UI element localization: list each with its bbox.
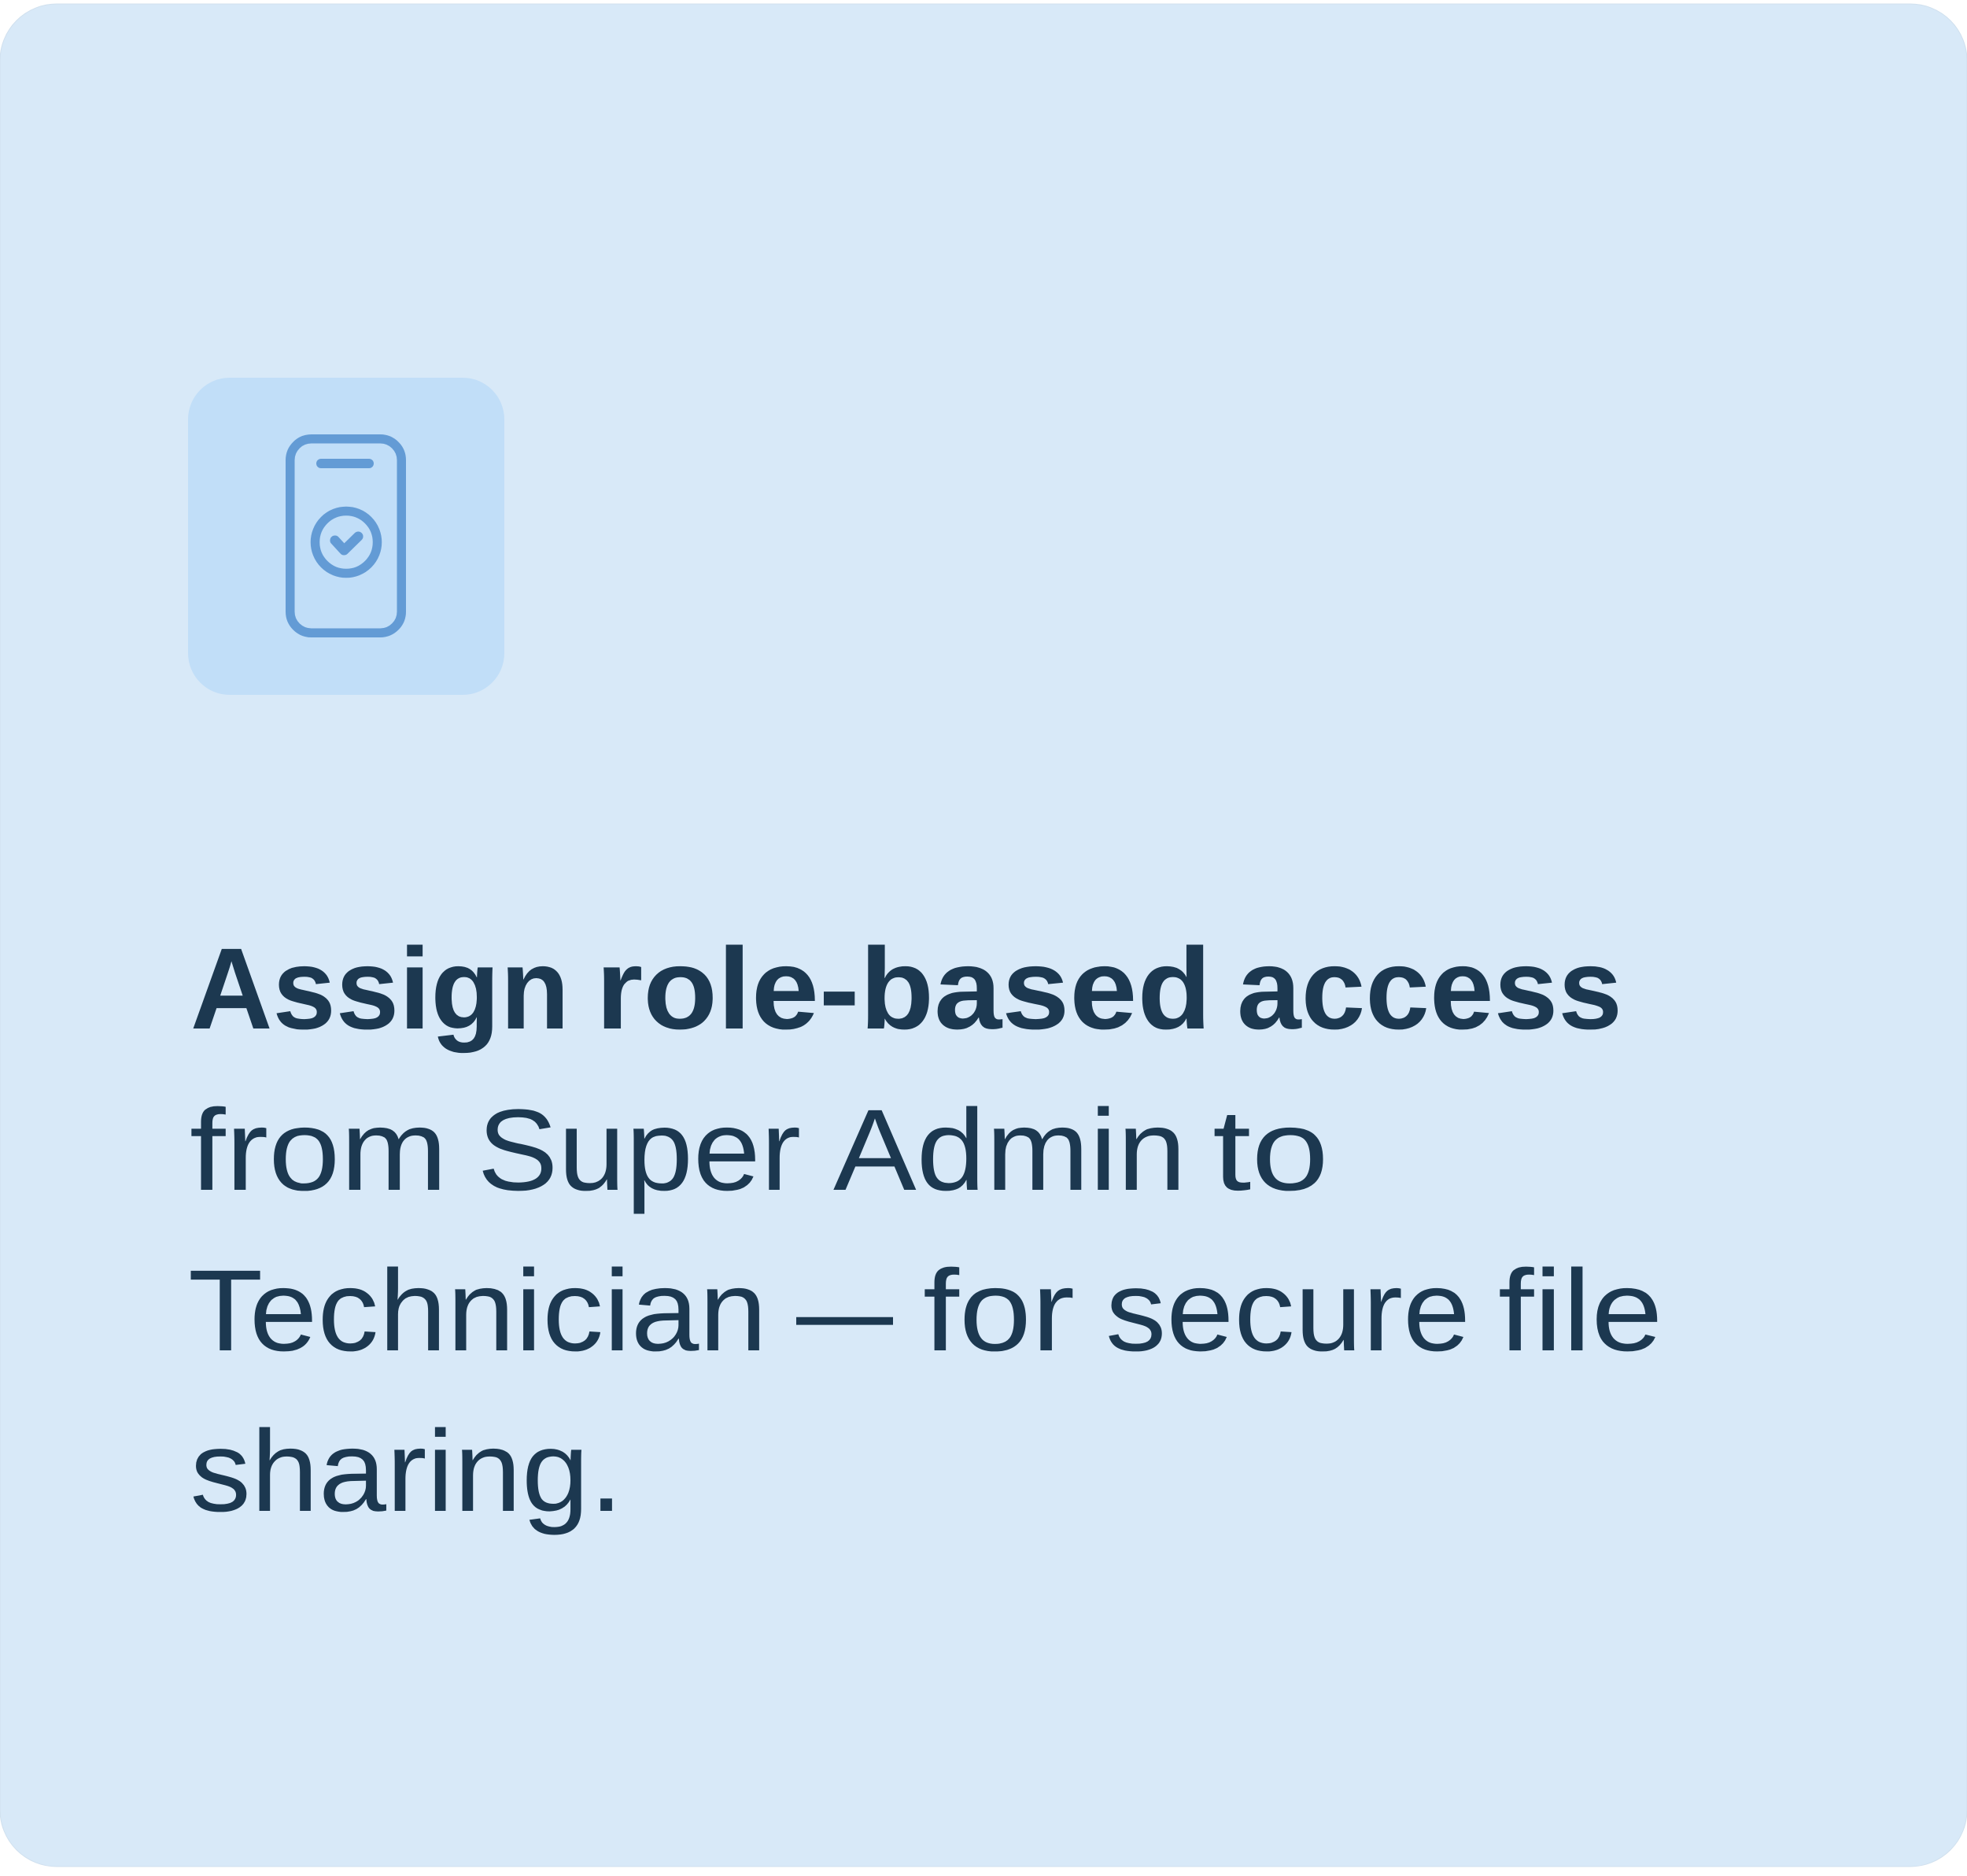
text line 3: —	[796, 1246, 893, 1376]
check mark	[335, 537, 358, 550]
text line 4: sharing.	[190, 1407, 623, 1536]
phone outline	[290, 439, 401, 633]
text line 3: Technician	[188, 1246, 767, 1376]
heading line: bold lead	[190, 925, 1622, 1054]
text line 3: for	[923, 1246, 1075, 1376]
text line 2	[190, 1086, 1329, 1215]
text block: description	[188, 925, 1663, 1536]
heading line: bold lead: Assign	[190, 925, 570, 1054]
phone speaker bar	[321, 459, 369, 468]
check circle	[315, 511, 378, 573]
text line 2: Admin	[833, 1086, 1186, 1215]
text line 2: Super	[477, 1086, 801, 1215]
text line 2: from	[190, 1086, 448, 1215]
icon tile	[188, 378, 504, 695]
heading line: bold lead: role-based	[596, 925, 1212, 1054]
heading line: bold lead: access	[1237, 925, 1622, 1054]
text line 3	[188, 1246, 1663, 1376]
text line 3: secure	[1105, 1246, 1471, 1376]
text line 3: file	[1498, 1246, 1663, 1376]
icon: phone with check mark	[188, 378, 504, 695]
text line 2: to	[1212, 1086, 1329, 1215]
